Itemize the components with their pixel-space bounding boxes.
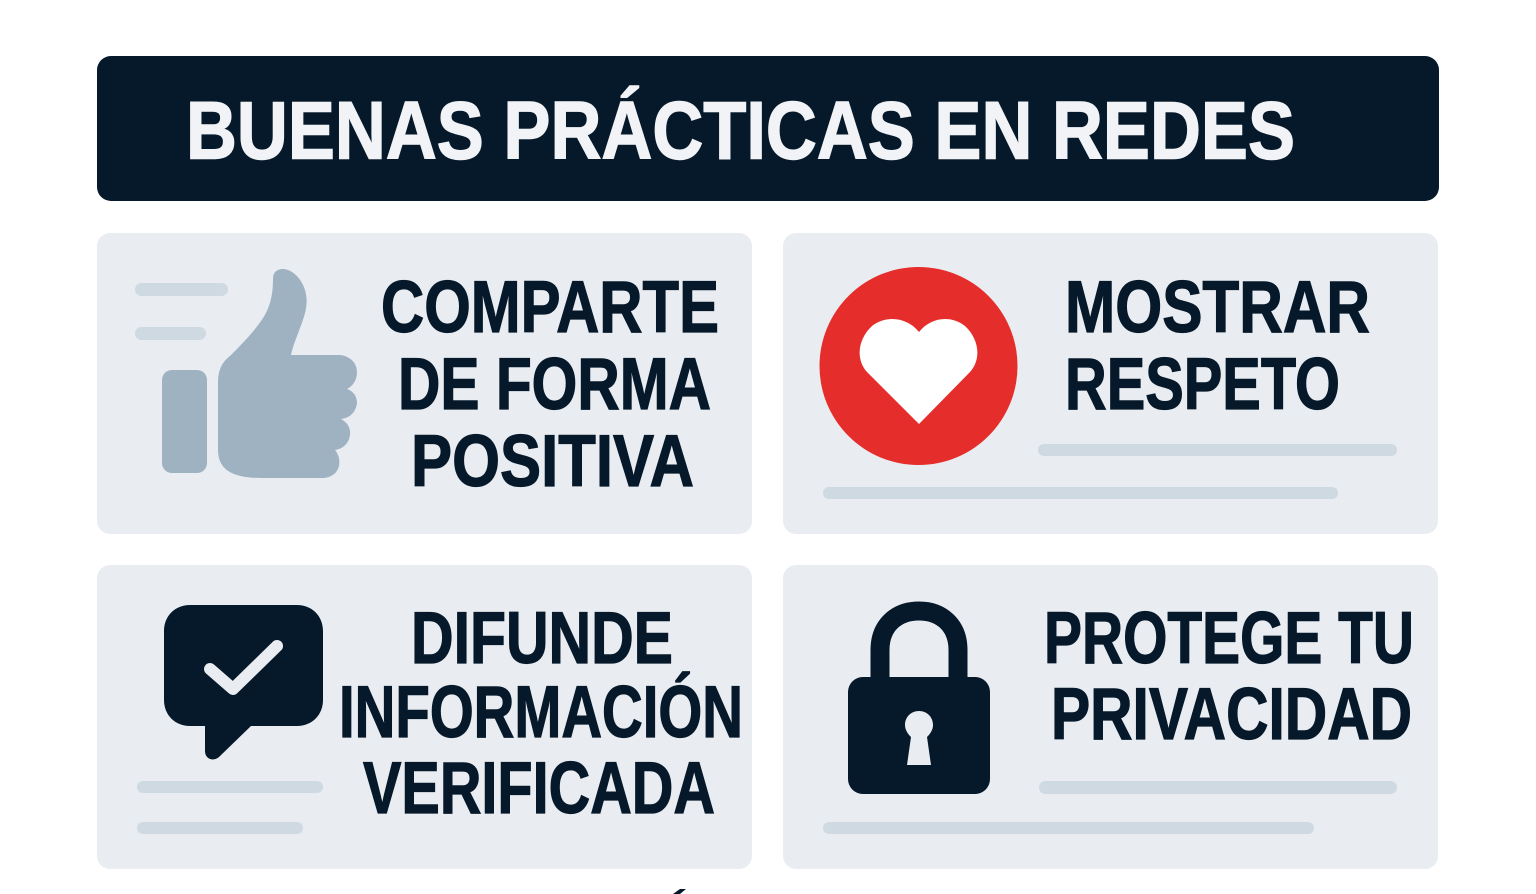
icon: speech bubble with check — [164, 605, 323, 759]
heading: mostrar respeto: RESPETO — [1065, 344, 1340, 425]
title: BUENAS PRÁCTICAS EN REDES — [186, 86, 1295, 176]
panel: comparte de forma positiva — [97, 233, 752, 534]
heading: difunde información verificada: INFORMACIÓN — [339, 672, 743, 753]
panel: difunde información verificada — [97, 565, 752, 869]
heading: protege tu privacidad — [1044, 598, 1414, 755]
title banner — [97, 56, 1439, 201]
heading: protege tu privacidad: PRIVACIDAD — [1051, 674, 1412, 755]
cropped accent at bottom edge — [673, 889, 686, 894]
icon: padlock — [848, 611, 990, 794]
panel: protege tu privacidad — [783, 565, 1438, 869]
heading: mostrar respeto: MOSTRAR — [1065, 267, 1370, 348]
heading: mostrar respeto — [1065, 267, 1370, 425]
heading: difunde información verificada: DIFUNDE — [411, 598, 673, 679]
placeholder lines — [823, 781, 1397, 834]
placeholder lines — [137, 781, 323, 834]
heading: comparte de forma positiva: COMPARTE — [381, 267, 719, 348]
heading: protege tu privacidad: PROTEGE TU — [1044, 598, 1414, 679]
heading: comparte de forma positiva — [381, 267, 719, 502]
icon: thumbs up — [162, 269, 357, 478]
icon: heart in red circle — [820, 267, 1018, 465]
heading: difunde información verificada: VERIFICADA — [363, 748, 715, 829]
heading: difunde información verificada — [339, 598, 743, 829]
heading: comparte de forma positiva: POSITIVA — [411, 421, 694, 502]
heading: comparte de forma positiva: DE FORMA — [398, 344, 711, 425]
panel: mostrar respeto — [783, 233, 1438, 534]
placeholder lines — [135, 283, 228, 340]
placeholder lines — [823, 444, 1397, 499]
